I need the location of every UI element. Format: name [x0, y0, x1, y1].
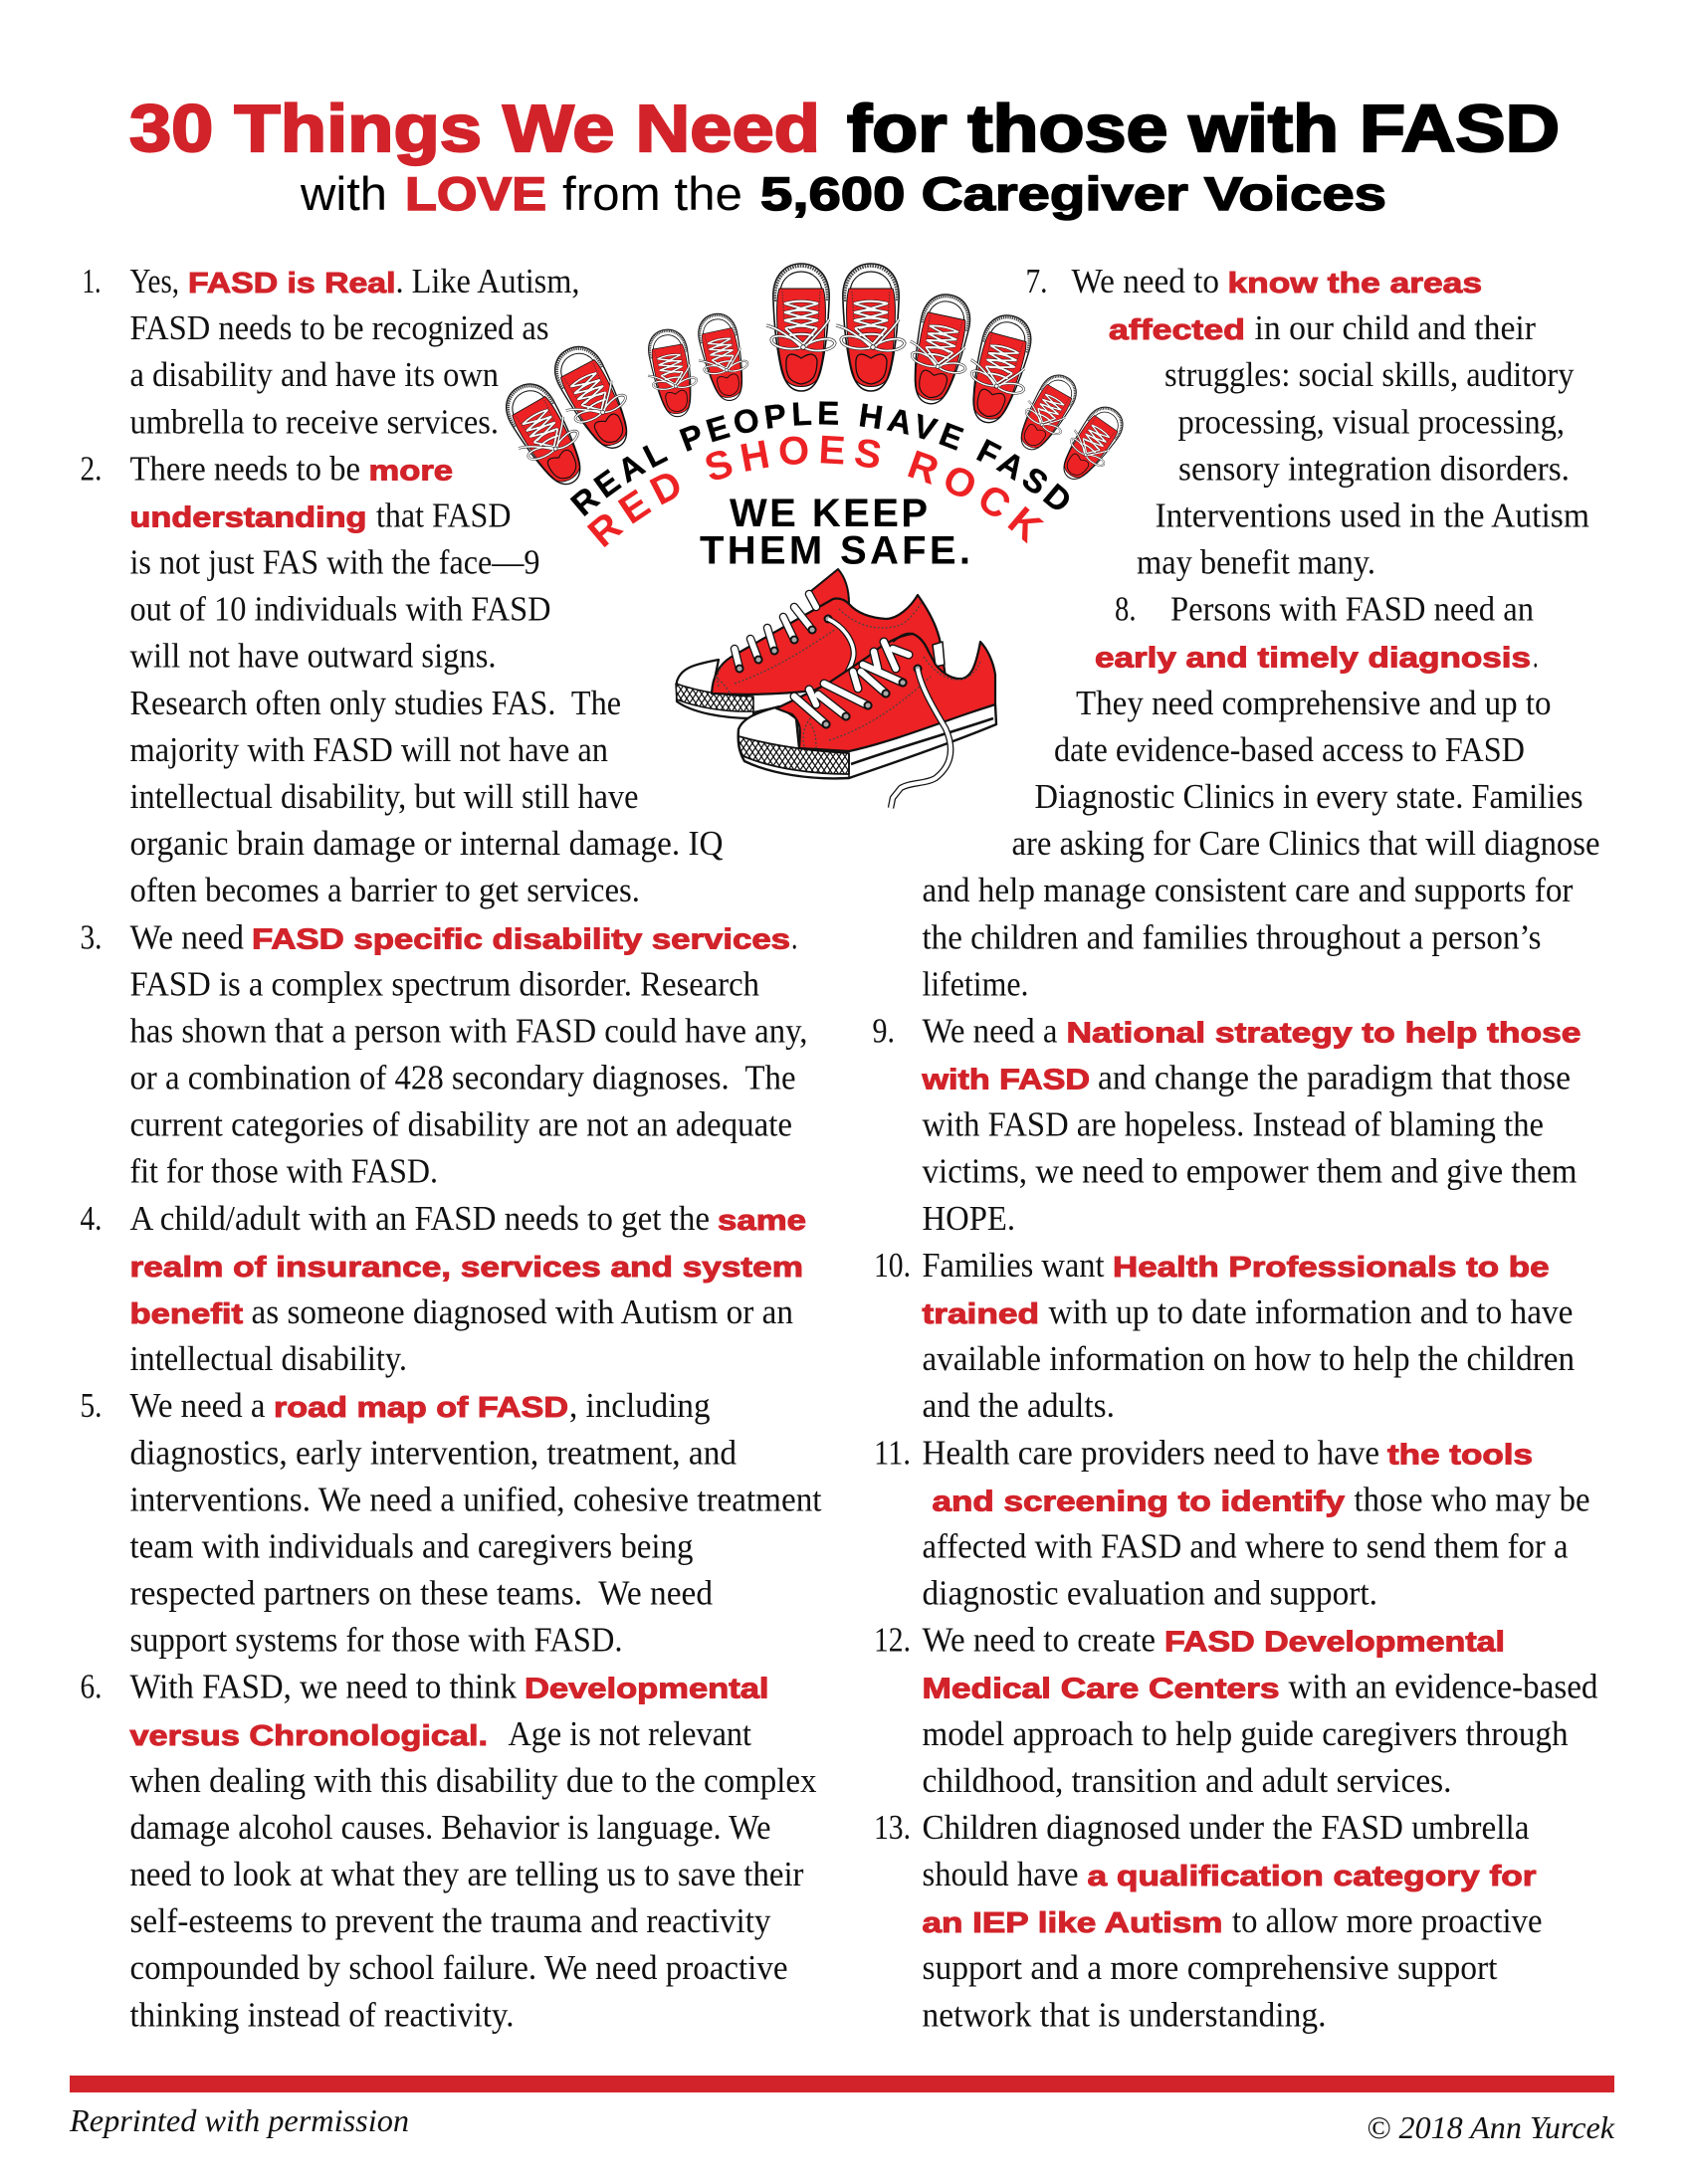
list item 12: with an evidence-based [1288, 1669, 1598, 1706]
highlight: National strategy to help those with FASD: National strategy to help those [1067, 1017, 1581, 1049]
list item 9: and change the paradigm that those [1098, 1059, 1571, 1096]
list item 3: 3. [80, 918, 102, 956]
list item 2 [80, 450, 724, 909]
list item 5 [80, 1387, 822, 1660]
list item 1: umbrella to receive services. [129, 403, 499, 441]
list item 12: childhood, transition and adult services. [922, 1762, 1451, 1800]
list item 8: Persons with FASD need an [1170, 591, 1534, 629]
icon: small shoe 4 [690, 309, 754, 405]
list item 8 [922, 591, 1600, 1003]
list item 3: or a combination of 428 secondary diagnoses. The [129, 1059, 796, 1096]
slogan: we keep them safe: THEM SAFE. [700, 529, 970, 573]
list item 4 [80, 1200, 806, 1378]
list item 12: 12. [874, 1622, 911, 1660]
list item 5: interventions. We need a unified, cohesive treatment [129, 1481, 822, 1518]
list item 1: Yes, [129, 263, 179, 300]
list item 7: in our child and their [1254, 309, 1536, 347]
list item 1 [82, 263, 579, 441]
list item 5: support systems for those with FASD. [129, 1622, 623, 1660]
list item 7: 7. [1025, 263, 1047, 300]
highlight: Developmental versus Chronological [129, 1674, 768, 1752]
footer bar [70, 2076, 1614, 2092]
slogan: we keep them safe [700, 492, 970, 573]
back sneaker [676, 569, 946, 718]
list item 7: Interventions used in the Autism [1155, 497, 1589, 535]
list item 3: fit for those with FASD. [129, 1153, 438, 1191]
list item 10: with up to date information and to have [1049, 1293, 1573, 1331]
list item 8: the children and families throughout a person’s [922, 918, 1541, 956]
list item 7: We need to [1071, 263, 1219, 300]
icon: small shoe 7 [899, 289, 980, 410]
list item 13: 13. [874, 1809, 911, 1847]
list item 8: lifetime. [922, 965, 1029, 1003]
list item 7: processing, visual processing, [1178, 403, 1565, 441]
list item 5: team with individuals and caregivers being [129, 1527, 693, 1565]
highlight: Health Professionals to be trained: Health Professionals to be [1113, 1252, 1549, 1284]
list item 2: 2. [80, 450, 102, 488]
list item 3 [80, 918, 808, 1191]
list item 7: may benefit many. [1137, 543, 1375, 581]
list item 11: those who may be [1354, 1481, 1590, 1518]
highlight: same realm of insurance, services and system benefit: benefit [129, 1298, 243, 1330]
title: for those with FASD [847, 92, 1560, 166]
list item 4: A child/adult with an FASD needs to get the [129, 1200, 710, 1238]
subtitle: LOVE [405, 167, 546, 220]
list item 4: intellectual disability. [129, 1340, 407, 1378]
icon: small shoe 10 [1050, 398, 1133, 490]
highlight: know the areas affected [1109, 268, 1482, 346]
icon: small shoe 9 [1007, 366, 1086, 459]
subtitle: from the [562, 167, 742, 220]
front sneaker [738, 634, 996, 808]
list item 13: network that is understanding. [922, 1996, 1326, 2034]
list item 2: organic brain damage or internal damage. IQ [129, 825, 724, 863]
list item 3: has shown that a person with FASD could have any, [129, 1012, 808, 1050]
icon: small shoe 8 [956, 308, 1041, 430]
highlight: road map of FASD: road map of FASD [274, 1392, 568, 1424]
highlight: National strategy to help those with FASD [921, 1017, 1581, 1096]
icon: pair of red sneakers [676, 569, 996, 808]
list item 9: We need a [922, 1012, 1057, 1050]
list item 4: 4. [80, 1200, 102, 1238]
subtitle: with [300, 167, 387, 220]
icon: small shoe 6 [836, 264, 905, 391]
list item 8: and help manage consistent care and supports for [922, 872, 1574, 909]
subtitle [300, 167, 1386, 220]
highlight: Health Professionals to be trained [922, 1252, 1549, 1330]
highlight: FASD Developmental Medical Care Centers: FASD Developmental [1164, 1627, 1505, 1659]
highlight: same realm of insurance, services and system benefit [129, 1205, 806, 1330]
highlight: know the areas affected: affected [1109, 314, 1245, 346]
list item 9: with FASD are hopeless. Instead of blaming the [922, 1106, 1544, 1144]
list item 6 [80, 1669, 816, 2034]
list item 6: need to look at what they are telling us to save their [129, 1856, 804, 1893]
highlight: Developmental versus Chronological: Developmental [525, 1674, 768, 1705]
curved slogan: real people have FASD: REAL PEOPLE HAVE FASD [569, 401, 1069, 516]
highlight: same realm of insurance, services and system benefit: realm of insurance, services and system [129, 1252, 803, 1284]
highlight: the tools and screening to identify [932, 1439, 1533, 1517]
list item 9: victims, we need to empower them and give them [922, 1153, 1578, 1191]
list item 12: model approach to help guide caregivers through [922, 1715, 1569, 1753]
icon: small shoe 2 [541, 336, 645, 461]
list item 10: 10. [874, 1247, 911, 1285]
list item 10: Families want [922, 1247, 1105, 1285]
list item 13: should have [922, 1856, 1079, 1893]
list item 13: Children diagnosed under the FASD umbrella [922, 1809, 1529, 1847]
icon: small shoe 1 [492, 373, 598, 497]
subtitle: 5,600 Caregiver Voices [760, 167, 1386, 220]
highlight: a qualification category for an IEP like Autism: an IEP like Autism [922, 1907, 1222, 1939]
list item 7: sensory integration disorders. [1178, 450, 1570, 488]
highlight: the tools and screening to identify: the tools [1387, 1439, 1533, 1471]
list item 9: 9. [872, 1012, 895, 1050]
list item 5: 5. [80, 1387, 102, 1425]
list item 3: . [791, 918, 798, 956]
highlight: Developmental versus Chronological: versus Chronological. [129, 1720, 488, 1752]
list item 6: thinking instead of reactivity. [129, 1996, 514, 2034]
list item 6: damage alcohol causes. Behavior is language. We [129, 1809, 770, 1847]
list item 6: Age is not relevant [508, 1715, 751, 1753]
highlight: know the areas affected: know the areas [1228, 268, 1482, 299]
list item 3: We need [129, 918, 244, 956]
graphic: red shoes with slogan [506, 263, 1124, 809]
list item 2: will not have outward signs. [129, 638, 496, 676]
list item 2: that FASD [376, 497, 512, 535]
slogan: we keep them safe: WE KEEP [730, 492, 928, 535]
list item 8: date evidence-based access to FASD [1054, 731, 1525, 769]
list item 11: Health care providers need to have [922, 1434, 1379, 1472]
list item 9 [872, 1012, 1581, 1238]
highlight: FASD specific disability services: FASD specific disability services [252, 923, 790, 955]
list item 6: self-esteems to prevent the trauma and reactivity [129, 1902, 771, 1940]
list item 5: We need a [129, 1387, 265, 1425]
highlight: FASD Developmental Medical Care Centers: Medical Care Centers [922, 1674, 1280, 1705]
list item 8: . [1533, 638, 1539, 676]
highlight: National strategy to help those with FASD: with FASD [921, 1065, 1090, 1096]
list item 8: are asking for Care Clinics that will diagnose [1011, 825, 1600, 863]
footer: copyright: © 2018 Ann Yurcek [1367, 2109, 1615, 2145]
list item 8: Diagnostic Clinics in every state. Families [1035, 778, 1582, 816]
highlight: a qualification category for an IEP like Autism [922, 1861, 1537, 1939]
list item 13 [874, 1809, 1543, 2034]
list item 5: , including [569, 1387, 711, 1425]
list item 1: 1. [82, 263, 102, 300]
list item 2: majority with FASD will not have an [129, 731, 608, 769]
list item 12 [874, 1622, 1598, 1800]
list item 2: is not just FAS with the face—9 [129, 543, 539, 581]
list item 10: available information on how to help the children [922, 1340, 1575, 1378]
highlight: more understanding: more [368, 455, 453, 487]
highlight: FASD Developmental Medical Care Centers [922, 1627, 1505, 1705]
list item 11: affected with FASD and where to send them for a [922, 1527, 1569, 1565]
icon: small shoe 5 [766, 264, 835, 391]
list item 9: HOPE. [922, 1200, 1015, 1238]
list item 2: Research often only studies FAS. The [129, 685, 621, 722]
list item 6: when dealing with this disability due to the complex [129, 1762, 816, 1800]
icon: small shoe 3 [641, 325, 703, 421]
highlight: Health Professionals to be trained: trained [922, 1298, 1039, 1330]
list item 6: With FASD, we need to think [129, 1669, 518, 1706]
list item 2: out of 10 individuals with FASD [129, 591, 551, 629]
list item 10: and the adults. [922, 1387, 1115, 1425]
list item 1: a disability and have its own [129, 356, 499, 394]
highlight: the tools and screening to identify: and screening to identify [932, 1486, 1345, 1517]
list item 5: diagnostics, early intervention, treatment, and [129, 1434, 737, 1472]
list item 2: intellectual disability, but will still have [129, 778, 639, 816]
list item 11 [874, 1434, 1590, 1612]
highlight: more understanding: understanding [129, 501, 366, 533]
list item 2: There needs to be [129, 450, 360, 488]
highlight: a qualification category for an IEP like Autism: a qualification category for [1087, 1861, 1537, 1892]
list item 6: compounded by school failure. We need proactive [129, 1949, 788, 1987]
list item 3: FASD is a complex spectrum disorder. Research [129, 965, 759, 1003]
list item 13: to allow more proactive [1232, 1902, 1543, 1940]
highlight: same realm of insurance, services and system benefit: same [718, 1205, 806, 1237]
list item 11: 11. [874, 1434, 911, 1472]
list item 13: support and a more comprehensive support [922, 1949, 1498, 1987]
highlight: FASD is Real: FASD is Real [188, 268, 396, 299]
title [129, 92, 1560, 166]
list item 7 [1025, 263, 1589, 581]
highlight: early and timely diagnosis: early and timely diagnosis [1095, 643, 1531, 675]
list item 1: FASD needs to be recognized as [129, 309, 549, 347]
list item 12: We need to create [922, 1622, 1156, 1660]
list item 8: 8. [1115, 591, 1137, 629]
list item 6: 6. [80, 1669, 102, 1706]
list item 1: . Like Autism, [396, 263, 579, 300]
list item 8: They need comprehensive and up to [1076, 685, 1551, 722]
footer: reprinted with permission: Reprinted with permission [69, 2102, 409, 2138]
list item 5: respected partners on these teams. We need [129, 1574, 713, 1612]
list item 4: as someone diagnosed with Autism or an [251, 1293, 793, 1331]
highlight: more understanding [129, 455, 453, 533]
list item 11: diagnostic evaluation and support. [922, 1574, 1377, 1612]
list item 2: often becomes a barrier to get services. [129, 872, 640, 909]
list item 10 [874, 1247, 1575, 1425]
list item 3: current categories of disability are not an adequate [129, 1106, 792, 1144]
title: 30 Things We Need [129, 92, 820, 166]
list item 7: struggles: social skills, auditory [1164, 356, 1575, 394]
curved slogan: red shoes rock: RED SHOES ROCK [587, 436, 1045, 547]
